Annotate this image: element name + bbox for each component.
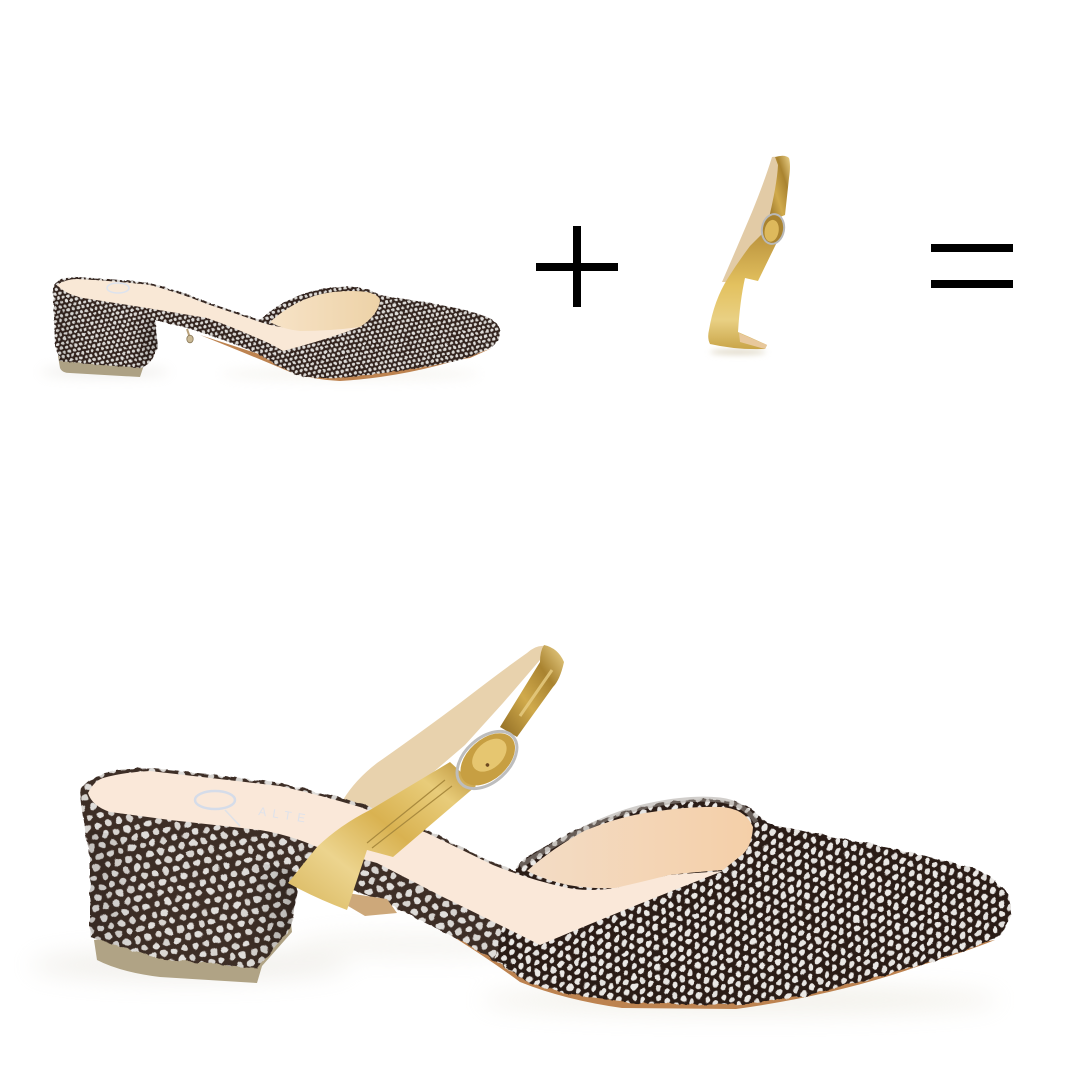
- insole brand text: ALTE: [258, 804, 312, 826]
- gold keeper stitching: [367, 780, 452, 848]
- buckle: [446, 720, 528, 800]
- gold strap wide lower piece: [288, 762, 476, 910]
- mule sole edge: [200, 335, 492, 381]
- inner cup: [527, 807, 753, 888]
- speckled heel and quarter: [80, 768, 573, 985]
- plus sign: [536, 226, 618, 307]
- mule heel shading: [55, 300, 158, 368]
- heel shading: [90, 830, 297, 968]
- strap tan lining: [722, 157, 780, 282]
- strap gold upper: [768, 156, 790, 222]
- cream insole: [88, 771, 723, 945]
- equals sign: [931, 244, 1013, 288]
- sole edge: [400, 905, 995, 1009]
- strap highlight: [520, 670, 552, 716]
- large slingback shoe: [30, 645, 1011, 1014]
- mule heel top-lift: [58, 356, 152, 377]
- ground shadow: [30, 933, 1000, 1014]
- heel top-lift: [94, 915, 292, 983]
- strap gold lower piece: [708, 232, 778, 349]
- mule ground shadow: [40, 367, 480, 380]
- mule insole logo: [107, 283, 129, 293]
- insole brand logo: [195, 791, 312, 826]
- strap shadow: [710, 349, 766, 355]
- standalone gold strap: [708, 156, 790, 355]
- strap end tab: [343, 893, 397, 916]
- mule small hanging buckle: [187, 329, 193, 343]
- strap sole tab: [739, 333, 767, 349]
- strap buckle: [760, 212, 786, 246]
- mule inner cup: [270, 291, 380, 331]
- mule speckled upper: [53, 277, 500, 378]
- gold upper strap: [500, 645, 564, 737]
- far rim greyish trim: [520, 799, 756, 866]
- mule cream insole: [57, 279, 360, 351]
- tan strap lining: [343, 646, 544, 810]
- top mule shoe: [40, 277, 500, 381]
- speckled toe and vamp: [495, 799, 1011, 1005]
